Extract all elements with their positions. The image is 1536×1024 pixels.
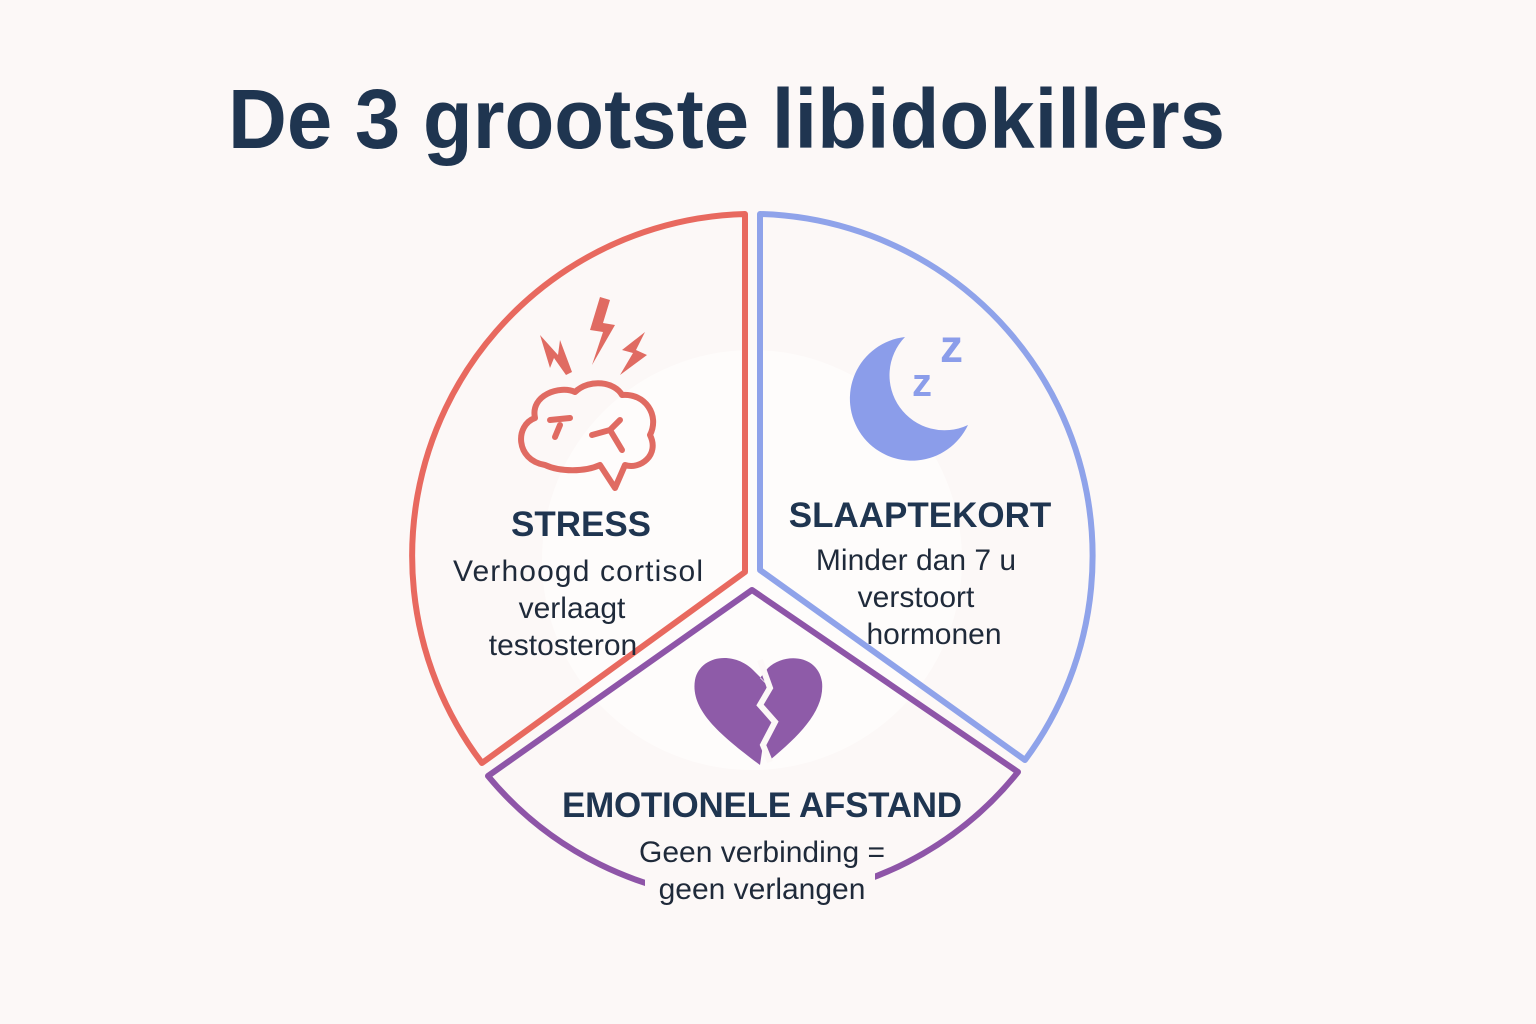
icon: moon bbox=[850, 320, 968, 461]
text: stress description: Verhoogd cortisol bbox=[453, 555, 703, 588]
icon: moon: z bbox=[940, 320, 963, 372]
text: stress description: testosteron bbox=[489, 629, 637, 662]
heading: STRESS: STRESS bbox=[511, 505, 651, 544]
panel: emotionele afstand bbox=[488, 590, 1018, 910]
panel: slaaptekort bbox=[760, 214, 1093, 760]
heading: SLAAPTEKORT: SLAAPTEKORT bbox=[789, 496, 1051, 535]
text: slaaptekort description: hormonen bbox=[866, 618, 1002, 651]
text: slaaptekort description: Minder dan 7 u bbox=[816, 544, 1016, 577]
panel: stress bbox=[412, 214, 745, 763]
icon: brain with lightning bbox=[521, 297, 653, 488]
title: De 3 grootste libidokillers bbox=[228, 72, 1225, 166]
heading: EMOTIONELE AFSTAND: EMOTIONELE AFSTAND bbox=[562, 786, 962, 825]
text: emotionele afstand description: Geen verbinding = bbox=[639, 836, 885, 869]
text: stress description: verlaagt bbox=[519, 592, 626, 625]
icon: broken heart bbox=[694, 658, 822, 765]
text: emotionele afstand description: geen verlangen bbox=[659, 873, 865, 906]
text: slaaptekort description: verstoort bbox=[858, 581, 975, 614]
icon: moon: z bbox=[912, 361, 932, 405]
